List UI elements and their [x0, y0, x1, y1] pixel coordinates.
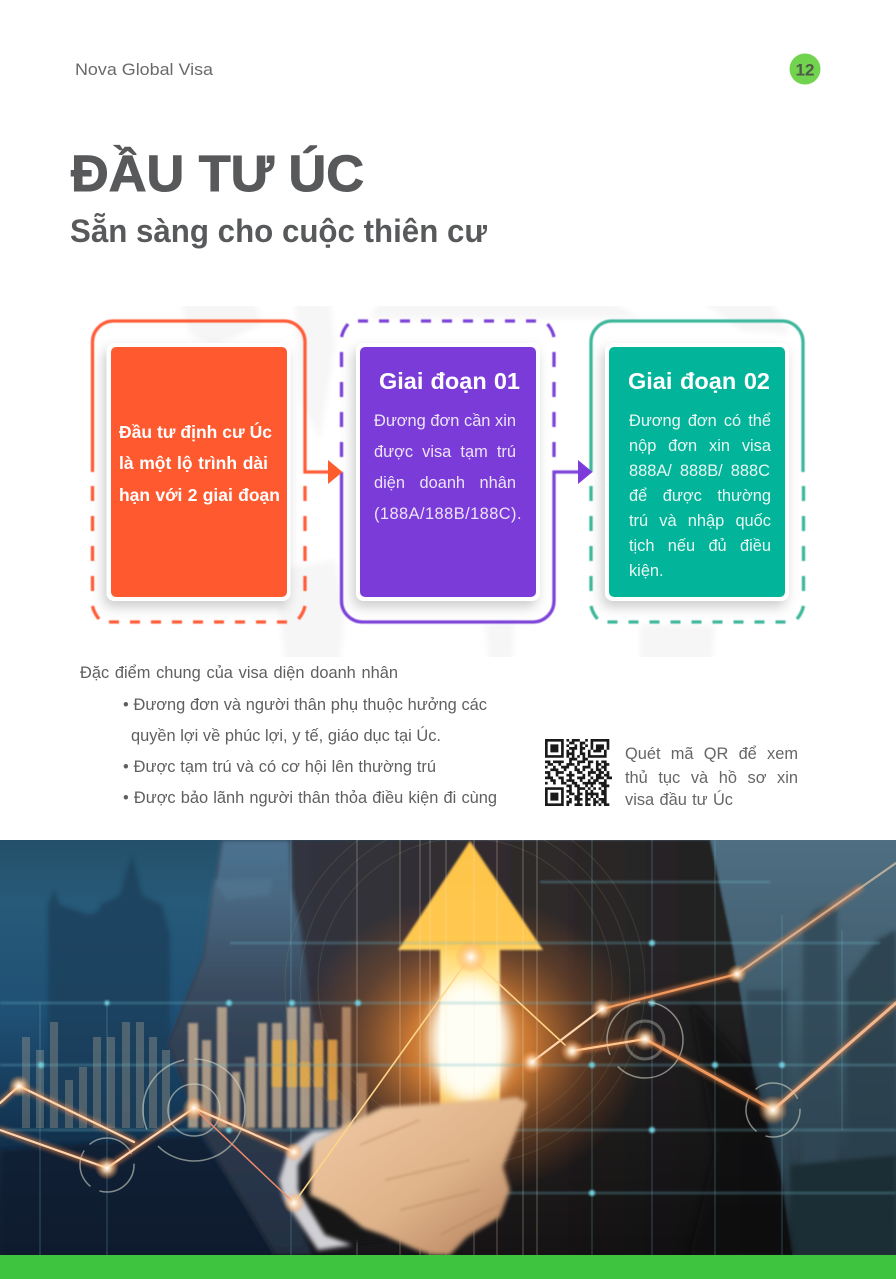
card: overview: [111, 347, 287, 597]
card: stage 02: trú và nhập quốc: [629, 512, 771, 530]
card: stage 01: diện doanh nhân: [374, 474, 516, 492]
text block: QR caption: visa đầu tư Úc: [625, 790, 733, 808]
title: ĐẦU TƯ ÚC: [71, 144, 364, 202]
card: stage 01: Giai đoạn 01: [379, 368, 520, 394]
card: stage 01: Đương đơn cần xin: [374, 412, 516, 430]
city skyline: [0, 855, 896, 1255]
subtitle: Sẵn sàng cho cuộc thiên cư: [70, 213, 488, 249]
hero image: businessman pointing at glowing arrow with growth chart: [0, 840, 896, 1255]
icon: QR code: [545, 739, 612, 806]
card: stage 02: Giai đoạn 02: [628, 368, 770, 394]
text block: common visa features: [80, 664, 497, 807]
page number badge: 12: [796, 60, 814, 80]
growth chart lines: [0, 863, 896, 1203]
glowing up arrow: [398, 841, 543, 1120]
card: stage 02: Đương đơn có thể: [629, 412, 771, 430]
text block: common visa features: • Được tạm trú và có cơ hội lên thường trú: [123, 758, 436, 776]
text block: QR caption: Quét mã QR để xem: [625, 744, 798, 762]
text block: QR caption: [625, 744, 798, 808]
diagram frames and world map backdrop: [90, 306, 806, 657]
card: stage 01: được visa tạm trú: [374, 442, 516, 460]
sleeve fold: [214, 878, 272, 900]
faint arcs: [285, 805, 645, 1165]
suit lower dark edge: [690, 1000, 792, 1255]
panel: investment stages diagram: [90, 306, 806, 657]
shirt cuff: [279, 1130, 352, 1250]
text block: common visa features: quyền lợi về phúc lợi, y tế, giáo dục tại Úc.: [131, 727, 441, 745]
card: stage 01: [360, 347, 536, 597]
card: stage 01: (188A/188B/188C).: [374, 504, 522, 522]
rings: [80, 1002, 800, 1192]
card: stage 02: tịch nếu đủ điều: [629, 537, 771, 555]
card: stage 02: 888A/ 888B/ 888C: [629, 462, 770, 480]
chart nodes: [8, 941, 788, 1214]
text block: common visa features: Đặc điểm chung của visa diện doanh nhân: [80, 664, 398, 682]
card: overview: Đầu tư định cư Úc: [119, 422, 272, 442]
card: overview: hạn với 2 giai đoạn: [119, 485, 280, 505]
sleeve: [168, 840, 360, 1255]
text block: QR caption: thủ tục và hồ sơ xin: [625, 768, 798, 786]
grid lines: [0, 882, 896, 1193]
chart bars: [22, 1022, 170, 1128]
green frame: [591, 321, 804, 622]
text block: common visa features: • Đương đơn và người thân phụ thuộc hưởng các: [123, 696, 487, 714]
footer bar: [0, 1255, 896, 1279]
purple frame: [342, 321, 580, 622]
card: stage 02: [609, 347, 785, 597]
page number badge: [790, 54, 820, 84]
card: overview: là một lộ trình dài: [119, 453, 268, 473]
card: stage 02: kiện.: [629, 562, 664, 580]
card: stage 02: để được thường: [629, 487, 771, 505]
text block: common visa features: • Được bảo lãnh người thân thỏa điều kiện đi cùng: [123, 789, 497, 807]
card: stage 02: nộp đơn xin visa: [629, 437, 771, 455]
suit: [168, 840, 792, 1255]
orange frame: [92, 321, 331, 622]
header brand: Nova Global Visa: [75, 60, 214, 79]
glow: [295, 895, 645, 1195]
dark gap between cuff and hand: [296, 1170, 385, 1245]
hand: [310, 1097, 527, 1255]
